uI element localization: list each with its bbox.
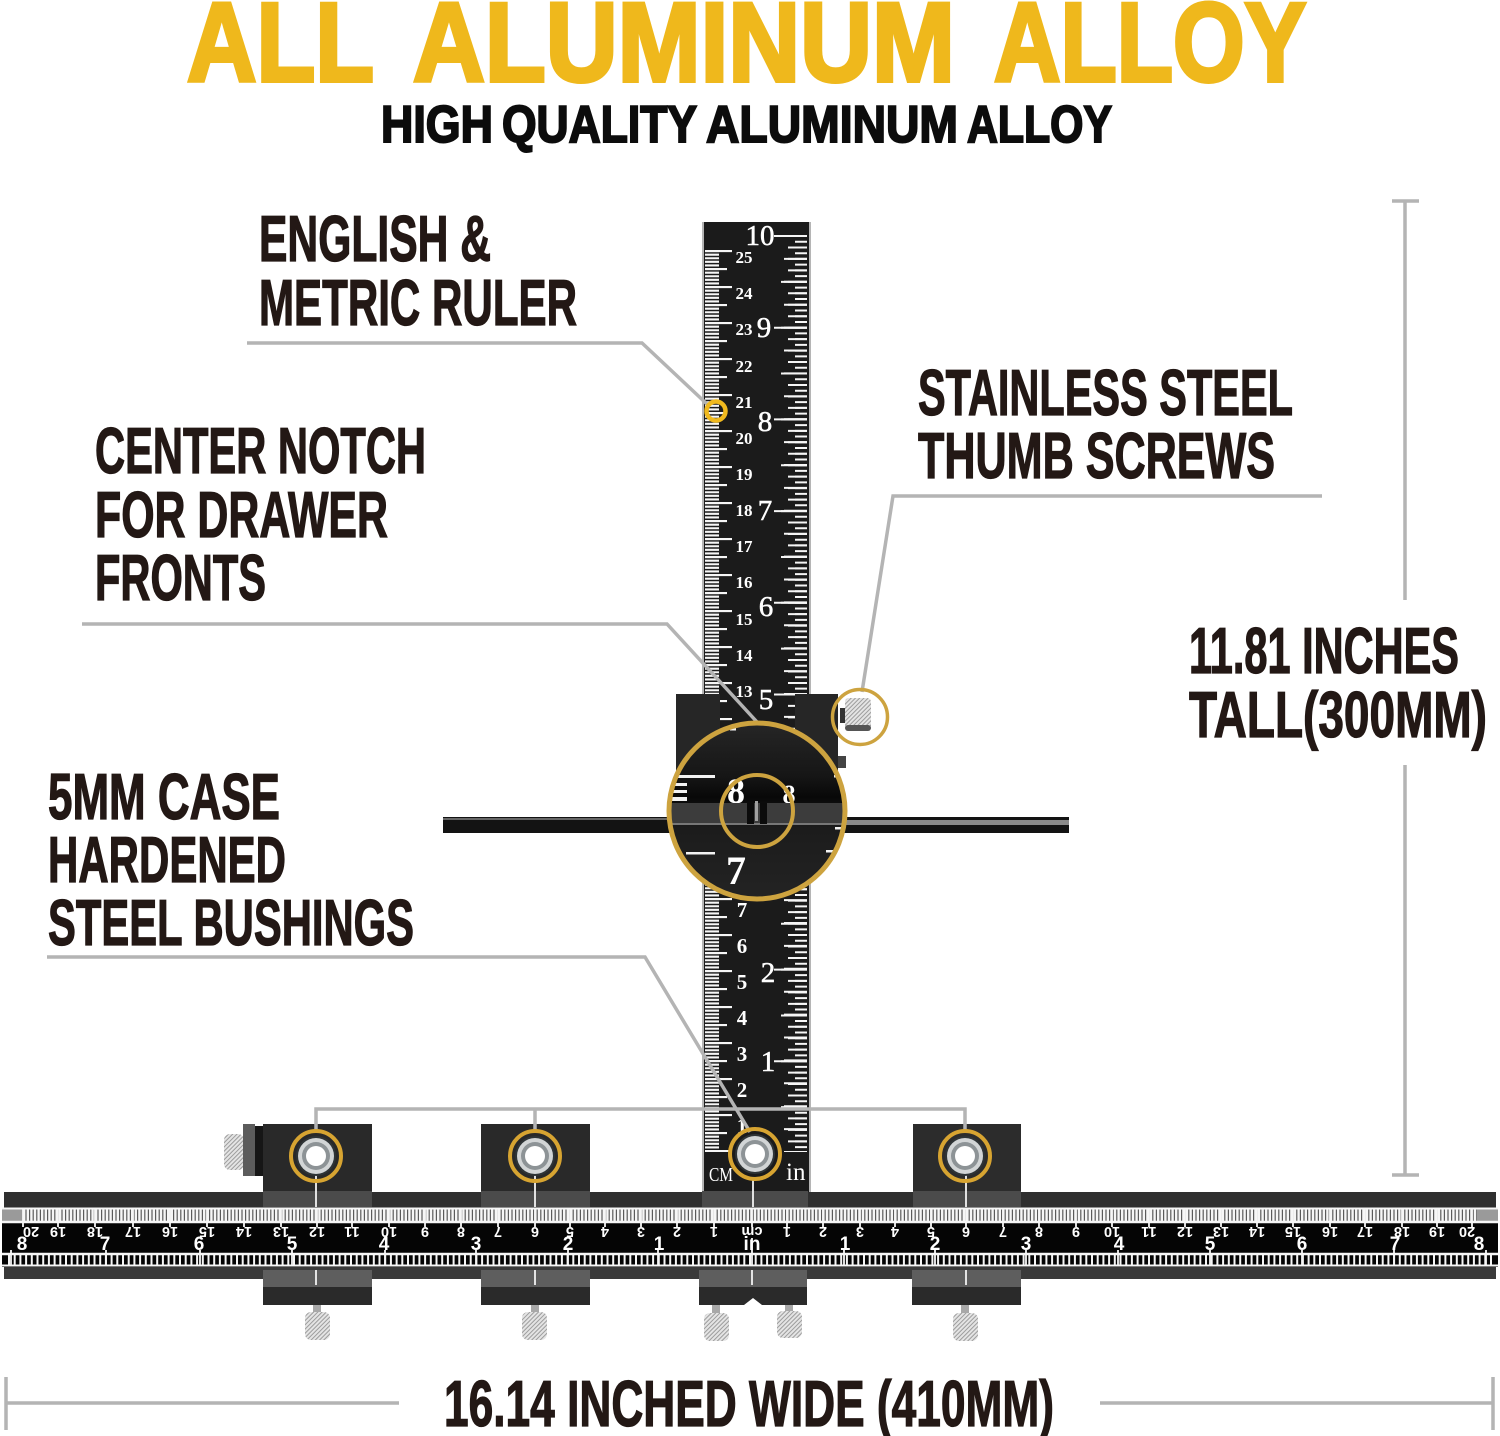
centimetre numbers: 24 bbox=[736, 284, 753, 303]
inch numbers: 2 bbox=[761, 957, 775, 989]
subtitle: HIGH bbox=[381, 96, 493, 154]
upside-down centimetre numbers: 7 bbox=[494, 1223, 502, 1239]
inch numbers on horizontal ruler: 3 bbox=[471, 1234, 481, 1255]
bushing: left bbox=[291, 1131, 341, 1181]
subtitle: QUALITY bbox=[502, 96, 697, 154]
upside-down centimetre numbers: 20 bbox=[1459, 1223, 1475, 1239]
horizontal ruler bbox=[2, 1192, 1498, 1279]
upside-down centimetre numbers: 5 bbox=[927, 1223, 935, 1239]
inch numbers bbox=[746, 220, 775, 1078]
centimetre numbers: 21 bbox=[736, 393, 752, 412]
inch numbers on horizontal ruler: 2 bbox=[563, 1234, 573, 1255]
upside-down centimetre numbers: 6 bbox=[531, 1223, 539, 1239]
bushing: second bbox=[510, 1131, 560, 1181]
inch numbers: 6 bbox=[759, 591, 773, 623]
upside-down centimetre numbers: 13 bbox=[273, 1223, 289, 1239]
upside-down centimetre numbers: 1 bbox=[710, 1223, 718, 1239]
upside-down centimetre numbers: 4 bbox=[601, 1223, 609, 1239]
subtitle: ALUMINUM bbox=[706, 96, 958, 154]
centimetre numbers: 1 bbox=[737, 1114, 747, 1138]
ruler unit labels bbox=[709, 1159, 806, 1186]
leader line: ruler callout bbox=[247, 343, 708, 405]
carriage blocks lower bbox=[263, 1270, 1021, 1305]
label: center notch: FOR DRAWER bbox=[95, 478, 388, 551]
label: steel bushings: HARDENED bbox=[48, 823, 286, 896]
inch numbers on horizontal ruler: 7 bbox=[100, 1234, 110, 1255]
label: thumb screws: STAINLESS STEEL bbox=[918, 356, 1293, 429]
icon: left thumb screw bbox=[224, 1124, 263, 1176]
upside-down centimetre numbers: 13 bbox=[1213, 1223, 1229, 1239]
inch numbers on horizontal ruler: 1 bbox=[840, 1234, 851, 1255]
inch numbers on horizontal ruler: 3 bbox=[1021, 1234, 1031, 1255]
label: english and metric ruler: METRIC RULER bbox=[259, 266, 577, 339]
upside-down centimetre numbers: 10 bbox=[1104, 1223, 1120, 1239]
upside-down centimetre numbers bbox=[23, 1223, 1475, 1239]
upside-down centimetre numbers: 11 bbox=[1141, 1223, 1157, 1239]
upside-down centimetre numbers: 8 bbox=[457, 1223, 465, 1239]
centimetre numbers: 2 bbox=[737, 1078, 747, 1102]
centimetre numbers: 16 bbox=[736, 573, 752, 592]
title bbox=[187, 0, 1306, 105]
upside-down centimetre numbers: cm bbox=[742, 1223, 762, 1239]
ruler unit labels: in bbox=[786, 1159, 806, 1186]
centimetre numbers: 23 bbox=[736, 320, 752, 339]
inch numbers on horizontal ruler: 5 bbox=[287, 1234, 298, 1255]
subtitle bbox=[381, 96, 1112, 154]
bushing: center bbox=[730, 1129, 780, 1179]
upside-down centimetre numbers: 11 bbox=[344, 1223, 360, 1239]
inch numbers on horizontal ruler: in bbox=[744, 1234, 760, 1255]
label: thumb screws: THUMB SCREWS bbox=[918, 419, 1275, 492]
leader line: thumb screw callout bbox=[862, 496, 1322, 692]
upside-down centimetre numbers: 9 bbox=[1072, 1223, 1080, 1239]
centimetre numbers: 22 bbox=[736, 357, 752, 376]
inch numbers on horizontal ruler: 4 bbox=[379, 1234, 390, 1255]
icon: upper thumb screw bbox=[832, 690, 888, 744]
icon: lower thumb screws bbox=[305, 1305, 978, 1341]
upside-down centimetre numbers: 10 bbox=[381, 1223, 397, 1239]
inch numbers on horizontal ruler: 8 bbox=[1474, 1234, 1484, 1255]
inch numbers: 10 bbox=[746, 220, 774, 252]
marker: ruler highlight ring bbox=[706, 402, 726, 420]
magnified center notch bbox=[660, 723, 860, 899]
metric tick comb bbox=[2, 1208, 1498, 1266]
inch numbers: 5 bbox=[759, 684, 773, 716]
label: english and metric ruler: ENGLISH & bbox=[259, 202, 491, 275]
centimetre numbers: 15 bbox=[736, 610, 752, 629]
upside-down centimetre numbers: 2 bbox=[673, 1223, 681, 1239]
upside-down centimetre numbers: 12 bbox=[1177, 1223, 1193, 1239]
upside-down centimetre numbers: 14 bbox=[236, 1223, 252, 1239]
subtitle: ALLOY bbox=[967, 96, 1112, 154]
inch numbers: 8 bbox=[758, 406, 772, 438]
T-square sliding block bbox=[676, 694, 846, 800]
inch numbers: 1 bbox=[761, 1046, 775, 1078]
width dimension line bbox=[6, 1377, 1493, 1430]
inch numbers on horizontal ruler: 2 bbox=[930, 1234, 940, 1255]
bracket linking the bushings bbox=[316, 1109, 965, 1132]
label: steel bushings: 5MM CASE bbox=[48, 760, 280, 833]
upside-down centimetre numbers: 15 bbox=[199, 1223, 215, 1239]
magnified center notch: 7 bbox=[726, 848, 746, 893]
inch numbers on horizontal ruler: 6 bbox=[1297, 1234, 1307, 1255]
centimetre numbers: 7 bbox=[737, 898, 747, 922]
upside-down centimetre numbers: 14 bbox=[1249, 1223, 1265, 1239]
bushing: right bbox=[940, 1131, 990, 1181]
centimetre numbers: 6 bbox=[737, 934, 747, 958]
upside-down centimetre numbers: 16 bbox=[162, 1223, 178, 1239]
upside-down centimetre numbers: 15 bbox=[1285, 1223, 1301, 1239]
inch numbers on horizontal ruler: 7 bbox=[1390, 1234, 1400, 1255]
horizontal fence bar bbox=[443, 817, 1069, 833]
vertical ruler bbox=[702, 220, 811, 1192]
centimetre numbers: 5 bbox=[737, 970, 747, 994]
leader line: bushings callout bbox=[47, 957, 750, 1132]
centimetre numbers: 13 bbox=[736, 682, 752, 701]
label: english and metric ruler bbox=[259, 202, 577, 339]
lower dark band bbox=[4, 1266, 1496, 1279]
upside-down centimetre numbers: 20 bbox=[23, 1223, 39, 1239]
label: steel bushings bbox=[48, 760, 414, 959]
centimetre numbers: 4 bbox=[737, 1006, 748, 1030]
metric ruler ticks bbox=[712, 235, 801, 1152]
centimetre numbers: 19 bbox=[736, 465, 752, 484]
carriage blocks upper bbox=[263, 1124, 1021, 1207]
upside-down centimetre numbers: 7 bbox=[999, 1223, 1007, 1239]
upside-down centimetre numbers: 19 bbox=[50, 1223, 66, 1239]
upside-down centimetre numbers: 6 bbox=[962, 1223, 970, 1239]
upside-down centimetre numbers: 18 bbox=[1394, 1223, 1410, 1239]
inch numbers on horizontal ruler bbox=[17, 1234, 1484, 1255]
inch numbers: 7 bbox=[758, 495, 772, 527]
upside-down centimetre numbers: 17 bbox=[125, 1223, 141, 1239]
upside-down centimetre numbers: 4 bbox=[891, 1223, 899, 1239]
centimetre numbers: 17 bbox=[736, 537, 753, 556]
inch numbers on horizontal ruler: 4 bbox=[1114, 1234, 1125, 1255]
upper dark band bbox=[4, 1192, 1496, 1208]
inch numbers on horizontal ruler: 5 bbox=[1205, 1234, 1216, 1255]
ruler unit labels: CM bbox=[709, 1164, 733, 1186]
upside-down centimetre numbers: 18 bbox=[87, 1223, 103, 1239]
upside-down centimetre numbers: 5 bbox=[566, 1223, 574, 1239]
centimetre numbers: 14 bbox=[736, 646, 753, 665]
upside-down centimetre numbers: 19 bbox=[1429, 1223, 1445, 1239]
centimetre numbers: 3 bbox=[737, 1042, 747, 1066]
upside-down centimetre numbers: 2 bbox=[819, 1223, 827, 1239]
upside-down centimetre numbers: 9 bbox=[421, 1223, 429, 1239]
magnified center notch: 8 bbox=[727, 771, 745, 811]
leader line: center notch callout bbox=[82, 624, 757, 722]
inch numbers on horizontal ruler: 8 bbox=[17, 1234, 27, 1255]
upside-down centimetre numbers: 17 bbox=[1357, 1223, 1373, 1239]
upside-down centimetre numbers: 3 bbox=[637, 1223, 645, 1239]
inch numbers on horizontal ruler: 1 bbox=[654, 1234, 665, 1255]
inch numbers: 9 bbox=[757, 312, 771, 344]
upside-down centimetre numbers: 1 bbox=[783, 1223, 791, 1239]
upside-down centimetre numbers: 16 bbox=[1322, 1223, 1338, 1239]
centimetre numbers bbox=[736, 248, 753, 1138]
label: center notch: CENTER NOTCH bbox=[95, 414, 426, 487]
label: center notch bbox=[95, 414, 426, 614]
centimetre numbers: 18 bbox=[736, 501, 752, 520]
centimetre numbers: 20 bbox=[736, 429, 752, 448]
black scale face bbox=[2, 1222, 1498, 1267]
magnified center notch: 8 bbox=[782, 780, 796, 809]
height dimension line bbox=[1392, 201, 1419, 1175]
upside-down centimetre numbers: 3 bbox=[856, 1223, 864, 1239]
label: steel bushings: STEEL BUSHINGS bbox=[48, 886, 414, 959]
label: thumb screws bbox=[918, 356, 1293, 492]
upside-down centimetre numbers: 8 bbox=[1035, 1223, 1043, 1239]
upside-down centimetre numbers: 12 bbox=[309, 1223, 325, 1239]
label: height dimension bbox=[1189, 614, 1487, 751]
centimetre numbers: 25 bbox=[736, 248, 752, 267]
label: center notch: FRONTS bbox=[95, 541, 266, 614]
inch numbers on horizontal ruler: 6 bbox=[194, 1234, 204, 1255]
